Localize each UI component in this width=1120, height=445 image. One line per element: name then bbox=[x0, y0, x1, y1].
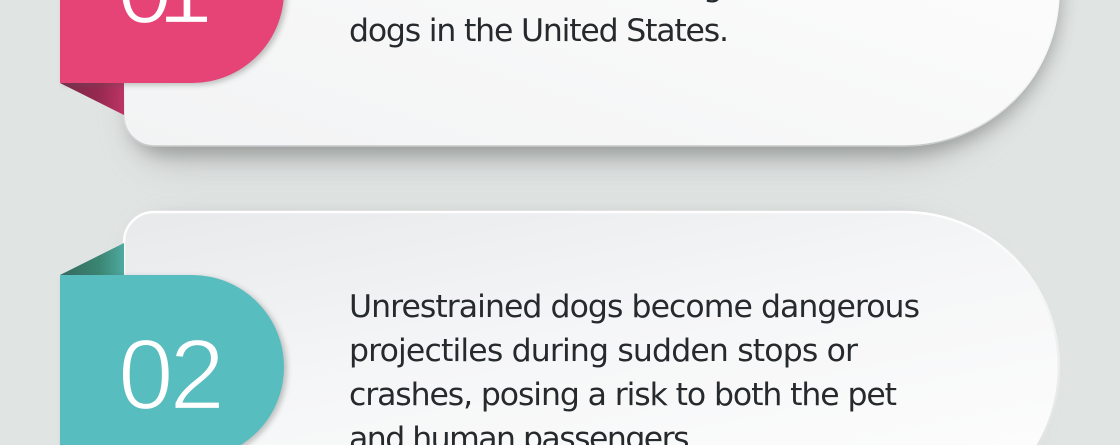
icon: teal ribbon fold bbox=[60, 243, 124, 275]
text: card 02 body: projectiles during sudden stops or bbox=[349, 333, 858, 369]
text: card 02 body: Unrestrained dogs become dangerous bbox=[349, 289, 920, 325]
text: card 02 body: crashes, posing a risk to both the pet bbox=[349, 377, 897, 413]
text: card 02 body bbox=[349, 289, 920, 445]
panel: card 01 bbox=[124, 0, 1060, 156]
badge: 01 bbox=[60, 0, 287, 85]
icon: pink ribbon fold bbox=[60, 83, 124, 115]
number 02: 02 bbox=[118, 319, 225, 431]
panel: card 02 bbox=[124, 212, 1059, 445]
badge: 02 bbox=[60, 275, 287, 445]
text: card 01 body: dogs in the United States. bbox=[349, 13, 729, 49]
